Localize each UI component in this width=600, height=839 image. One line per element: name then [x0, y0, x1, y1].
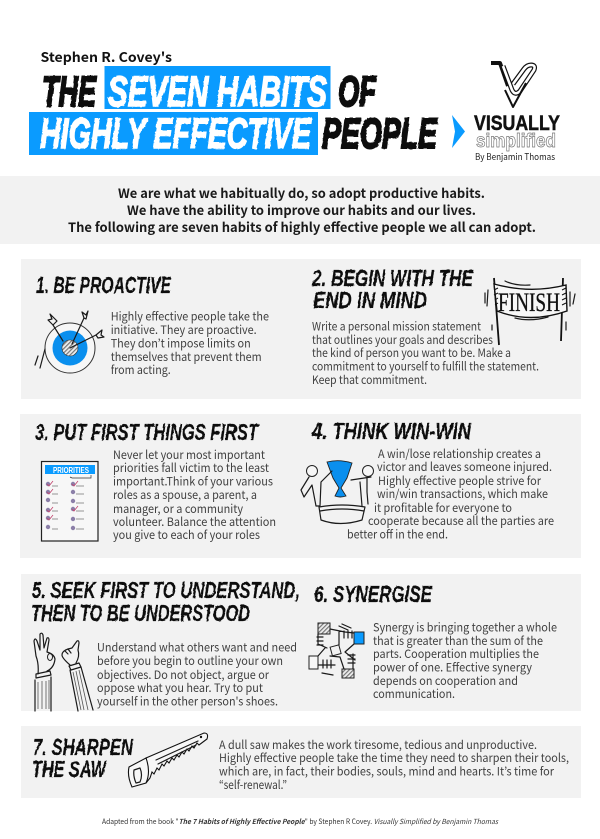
title highlight box 1: [104, 66, 330, 109]
icon: priorities checklist: [42, 462, 98, 541]
body text: that is greater than the sum of the: [373, 632, 543, 649]
body text: Synergy is bringing together a whole: [373, 618, 557, 636]
heading: 2. Begin With The End In Mind: 2. BEGIN WITH THE: [311, 265, 473, 291]
heading: 2. Begin With The End In Mind: [311, 265, 473, 313]
intro line 2: We have the ability to improve our habits and our lives.: [127, 200, 476, 219]
icon: finish banner: FINISH: [498, 288, 560, 317]
heading: 6. Synergise: 6. SYNERGISE: [314, 581, 432, 607]
body text: Write a personal mission statement: [312, 318, 482, 334]
title word: THE: THE: [42, 68, 97, 116]
panel: habit 4 think win-win: [300, 414, 581, 558]
body text: Highly effective people take the: [111, 308, 269, 324]
body text: [373, 618, 557, 702]
body text: parts. Cooperation multiplies the: [373, 645, 539, 662]
body text: the kind of person you want to be. Make a: [312, 344, 511, 361]
body text: [113, 446, 276, 543]
logo: Visually Simplified: [474, 63, 560, 163]
heading: 3. Put First Things First: 3. PUT FIRST THINGS FIRST: [35, 419, 259, 445]
heading: 7. Sharpen The Saw: THE SAW: [32, 756, 108, 782]
title word: PEOPLE: PEOPLE: [322, 110, 438, 158]
body text: you give to each of your roles: [113, 526, 260, 543]
heading: 5. Seek First To Understand, Then To Be Understood: [31, 577, 300, 626]
heading: 5. Seek First To Understand, Then To Be Understood: THEN TO BE UNDERSTOOD: [31, 600, 250, 626]
body text: power of one. Effective synergy: [373, 658, 532, 676]
intro line 3: The following are seven habits of highly effective people we all can adopt.: [68, 217, 536, 236]
icon: logo mark: [491, 63, 535, 107]
body text: priorities fall victim to the least: [113, 459, 270, 476]
title word: OF: OF: [338, 68, 377, 116]
body text: yourself in the other person's shoes.: [97, 692, 278, 710]
body text: Never let your most important: [113, 446, 266, 463]
title highlight box 2: [29, 112, 318, 155]
title words: HIGHLY EFFECTIVE: HIGHLY EFFECTIVE: [40, 110, 312, 158]
panel: habit 2 begin with the end in mind: [300, 259, 581, 399]
body text: from acting.: [111, 361, 171, 378]
body text: objectives. Do not object, argue or: [97, 666, 269, 683]
panel: habit 6 synergise: [300, 574, 581, 711]
body text: roles as a spouse, a parent, a: [113, 486, 257, 503]
body text: A dull saw makes the work tiresome, tedious and unproductive.: [219, 736, 537, 753]
body text: They don’t impose limits on: [111, 334, 251, 352]
panel: habit 1 be proactive: [21, 259, 300, 399]
body text: [312, 318, 539, 388]
intro band: [0, 176, 600, 244]
body text: cooperate because all the parties are: [368, 512, 554, 529]
icon: hand saw: [128, 733, 208, 787]
body text: win/win transactions, which make: [377, 485, 548, 502]
icon: target with arrows: [35, 311, 104, 373]
icon: hands gesturing: [34, 633, 93, 711]
heading: 5. Seek First To Understand, Then To Be Understood: 5. SEEK FIRST TO UNDERSTAND,: [32, 577, 300, 603]
title words: SEVEN HABITS: SEVEN HABITS: [108, 68, 327, 116]
logo wordmark: VISUALLY: [474, 112, 560, 135]
heading: 7. Sharpen The Saw: 7. SHARPEN: [33, 734, 133, 760]
icon: priorities checklist: PRIORITIES: [53, 466, 90, 475]
body text: it profitable for everyone to: [374, 499, 512, 516]
body text: volunteer. Balance the attention: [113, 513, 276, 530]
body text: victor and leaves someone injured.: [377, 458, 552, 475]
body text: commitment to yourself to fulfill the statement.: [312, 358, 539, 374]
body text: [111, 308, 269, 378]
intro line 1: We are what we habitually do, so adopt productive habits.: [118, 183, 485, 202]
author line: Stephen R. Covey's: [40, 46, 172, 66]
body text: Understand what others want and need: [97, 638, 297, 656]
body text: which are, in fact, their bodies, souls, mind and hearts. It’s time for: [219, 762, 554, 780]
icon: finish banner: [485, 278, 575, 345]
body text: communication.: [373, 685, 455, 702]
body text: depends on cooperation and: [373, 672, 518, 689]
panel: habit 3 put first things first: [20, 414, 300, 558]
body text: Highly effective people strive for: [378, 472, 541, 489]
icon: two figures holding trophy: [301, 461, 374, 524]
heading: 2. Begin With The End In Mind: END IN MIND: [313, 287, 427, 313]
body text: [347, 445, 554, 542]
panel: habit 5 seek first to understand: [21, 574, 300, 711]
heading: 4. Think Win-Win: 4. THINK WIN-WIN: [311, 418, 471, 444]
panel: habit 7 sharpen the saw: [21, 726, 581, 798]
body text: oppose what you hear. Try to put: [97, 679, 264, 696]
logo byline: By Benjamin Thomas: [475, 150, 555, 163]
body text: before you begin to outline your own: [97, 652, 283, 669]
body text: initiative. They are proactive.: [111, 321, 257, 338]
logo sub-wordmark: simplified: [476, 131, 556, 152]
body text: manager, or a community: [113, 500, 243, 517]
body text: “self-renewal.”: [219, 776, 287, 793]
body text: [219, 736, 569, 793]
heading: 7. Sharpen The Saw: [32, 734, 133, 782]
body text: Highly effective people take the time they need to sharpen their tools,: [219, 749, 569, 766]
arrow: blue chevron: [452, 115, 465, 148]
body text: that outlines your goals and describes: [312, 331, 493, 348]
body text: A win/lose relationship creates a: [378, 445, 541, 462]
body text: Keep that commitment.: [312, 371, 427, 388]
icon: interlocked hands: [309, 623, 364, 678]
heading: 1. Be Proactive: 1. BE PROACTIVE: [36, 272, 171, 298]
footer credit: Adapted from the book "The 7 Habits of Highly Effective People" by Stephen R Covey. Visually Simplified by Benjamin Thomas: [102, 817, 499, 827]
body text: important.Think of your various: [113, 472, 273, 490]
body text: better off in the end.: [347, 526, 448, 542]
body text: themselves that prevent them: [111, 348, 262, 365]
header: title block: [29, 46, 438, 158]
body text: [97, 638, 297, 710]
